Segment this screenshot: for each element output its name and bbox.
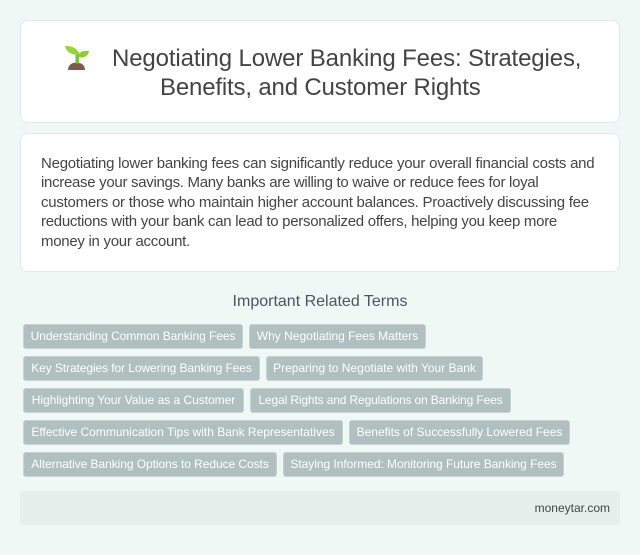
text: intro paragraph: reductions with your bank can lead to personalized offers, helping you keep more: [41, 213, 557, 230]
tag: Legal Rights and Regulations on Banking Fees: [258, 393, 502, 407]
tag: Preparing to Negotiate with Your Bank: [273, 361, 476, 375]
tag: [250, 388, 511, 413]
heading: important related terms: Important Related Terms: [233, 293, 407, 310]
heading: title line 1: Negotiating Lower Banking Fees: Strategies,: [112, 45, 581, 72]
tag: Alternative Banking Options to Reduce Costs: [31, 457, 269, 471]
tag: [23, 452, 277, 477]
tag: [23, 388, 244, 413]
tag: Benefits of Successfully Lowered Fees: [357, 425, 562, 439]
tag: [283, 452, 564, 477]
tag: Effective Communication Tips with Bank Representatives: [31, 425, 335, 439]
text: intro paragraph: money in your account.: [41, 233, 190, 250]
text: intro paragraph: increase your savings. Many banks are willing to waive or reduce fees for loyal: [41, 174, 538, 191]
tag: Highlighting Your Value as a Customer: [32, 393, 235, 407]
text: intro paragraph: [41, 155, 594, 250]
tag: [23, 324, 243, 349]
text: intro paragraph: Negotiating lower banking fees can significantly reduce your overall financial costs and: [41, 155, 594, 172]
tags: related terms: [23, 324, 570, 477]
tag: [23, 420, 343, 445]
heading: title line 2: Benefits, and Customer Rights: [160, 74, 481, 101]
tag: [23, 356, 260, 381]
text: intro paragraph: customers or those who maintain higher account balances. Proactively discussing fee: [41, 194, 589, 211]
footer: site name: moneytar.com: [535, 501, 610, 515]
tag: Key Strategies for Lowering Banking Fees: [31, 361, 252, 375]
tag: Understanding Common Banking Fees: [31, 329, 235, 343]
tag: Why Negotiating Fees Matters: [257, 329, 418, 343]
tag: [249, 324, 426, 349]
footer bar: [20, 491, 620, 525]
tag: [266, 356, 483, 381]
tag: Staying Informed: Monitoring Future Banking Fees: [290, 457, 557, 471]
panel: title card: [20, 20, 620, 123]
tag: [349, 420, 570, 445]
icon: seedling: [65, 46, 89, 70]
panel: intro card: [20, 133, 620, 272]
